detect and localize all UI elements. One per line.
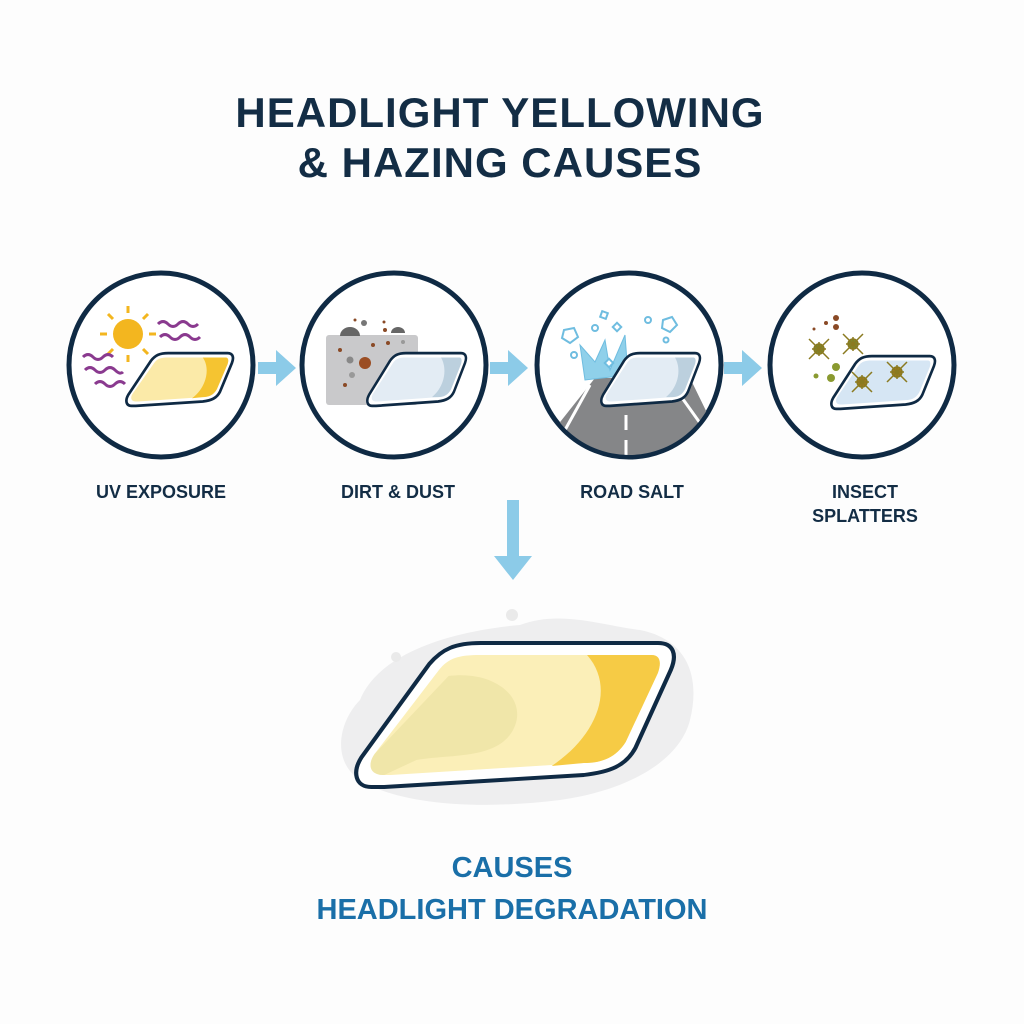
arrow xyxy=(258,350,296,386)
conclusion text: HEADLIGHT DEGRADATION xyxy=(317,894,707,926)
title xyxy=(235,89,765,186)
icon: yellow headlight xyxy=(126,353,233,406)
labels xyxy=(96,482,918,526)
labels: INSECT xyxy=(832,482,898,502)
icon: clear headlight xyxy=(367,353,466,406)
title: & HAZING CAUSES xyxy=(298,139,702,186)
icon: headlight xyxy=(601,353,700,406)
title: HEADLIGHT YELLOWING xyxy=(235,89,765,136)
panel: road salt xyxy=(530,273,730,460)
arrow xyxy=(490,350,528,386)
panel: insect splatters xyxy=(770,273,954,457)
conclusion text: CAUSES xyxy=(452,852,572,884)
icon: dirt block xyxy=(326,318,418,405)
conclusion text xyxy=(317,852,707,926)
labels: DIRT & DUST xyxy=(341,482,455,502)
icon: sun xyxy=(100,306,156,362)
icon: salt splash xyxy=(562,311,677,380)
panel: UV exposure xyxy=(69,273,253,457)
icon: uv waves xyxy=(83,322,200,386)
labels: ROAD SALT xyxy=(580,482,684,502)
panel: dirt & dust xyxy=(302,273,486,457)
labels: SPLATTERS xyxy=(812,506,918,526)
arrow: down xyxy=(494,500,532,580)
arrow xyxy=(724,350,762,386)
icon: road xyxy=(560,378,706,455)
icon: headlight with bugs xyxy=(831,356,935,409)
icon: insects xyxy=(809,334,907,392)
labels: UV EXPOSURE xyxy=(96,482,226,502)
illustration: degraded headlight xyxy=(341,609,693,805)
